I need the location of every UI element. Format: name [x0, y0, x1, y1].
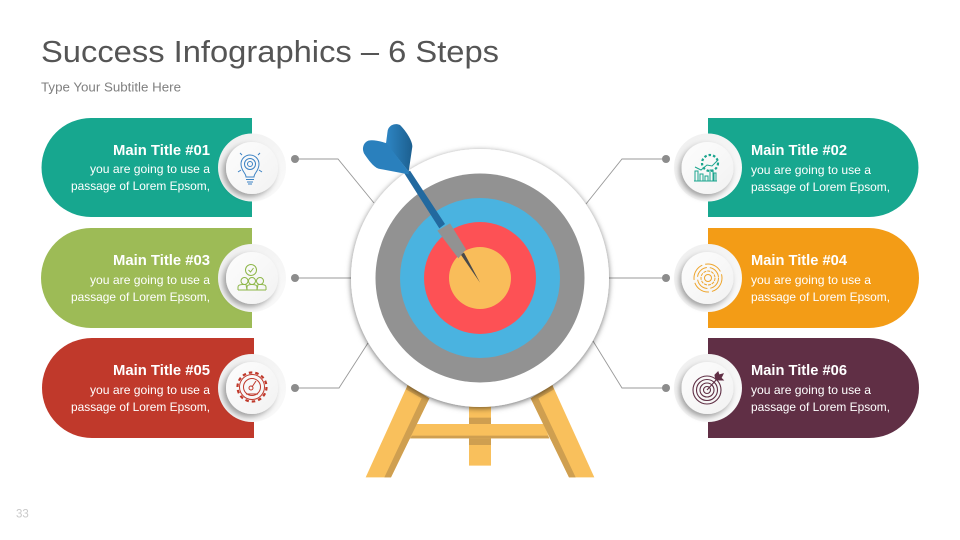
step 02 text: passage of Lorem Epsom,	[751, 180, 890, 194]
icon badge 03	[218, 244, 286, 312]
panel: step 01	[42, 118, 286, 217]
panel: step 06	[674, 338, 919, 438]
icon: chart and gear	[694, 155, 718, 181]
icon: target with dart	[693, 372, 723, 404]
target board	[351, 149, 609, 407]
step 05 text: you are going to use a	[90, 383, 210, 397]
panel: step 04	[674, 228, 919, 328]
icon badge 06	[674, 354, 742, 422]
panel: step 02	[674, 118, 918, 217]
icon badge 05	[218, 354, 286, 422]
step 05 title: Main Title #05	[113, 363, 210, 379]
step 06 title: Main Title #06	[751, 363, 847, 379]
step 02 text: you are going to use a	[751, 163, 871, 177]
step 01 text: passage of Lorem Epsom,	[71, 179, 210, 193]
icon: team	[238, 264, 266, 290]
panel: step 05	[42, 338, 286, 438]
step 03 text: passage of Lorem Epsom,	[71, 290, 210, 304]
icon: light bulb	[238, 153, 262, 184]
step 04 text: you are going to use a	[751, 273, 871, 287]
easel stand	[366, 385, 594, 477]
subtitle: Type Your Subtitle Here	[41, 80, 181, 94]
icon badge 02	[674, 134, 742, 202]
step 01 text: you are going to use a	[90, 162, 210, 176]
step 03 title: Main Title #03	[113, 253, 210, 269]
dart	[363, 124, 480, 283]
step 06 text: you are going to use a	[751, 383, 871, 397]
step 06 text: passage of Lorem Epsom,	[751, 400, 890, 414]
connector dots	[291, 155, 670, 392]
step 05 text: passage of Lorem Epsom,	[71, 400, 210, 414]
step 03 text: you are going to use a	[90, 273, 210, 287]
step 01 title: Main Title #01	[113, 143, 210, 159]
icon badge 04	[674, 244, 742, 312]
step 02 title: Main Title #02	[751, 143, 847, 159]
title: Success Infographics – 6 Steps	[41, 35, 499, 69]
connector lines	[295, 159, 666, 388]
step 04 title: Main Title #04	[751, 253, 847, 269]
icon: gauge gear	[238, 372, 266, 402]
page number: 33	[16, 508, 29, 520]
step 04 text: passage of Lorem Epsom,	[751, 290, 890, 304]
icon: maze circle	[694, 264, 722, 292]
panel: step 03	[41, 228, 286, 328]
icon badge 01	[218, 134, 286, 202]
